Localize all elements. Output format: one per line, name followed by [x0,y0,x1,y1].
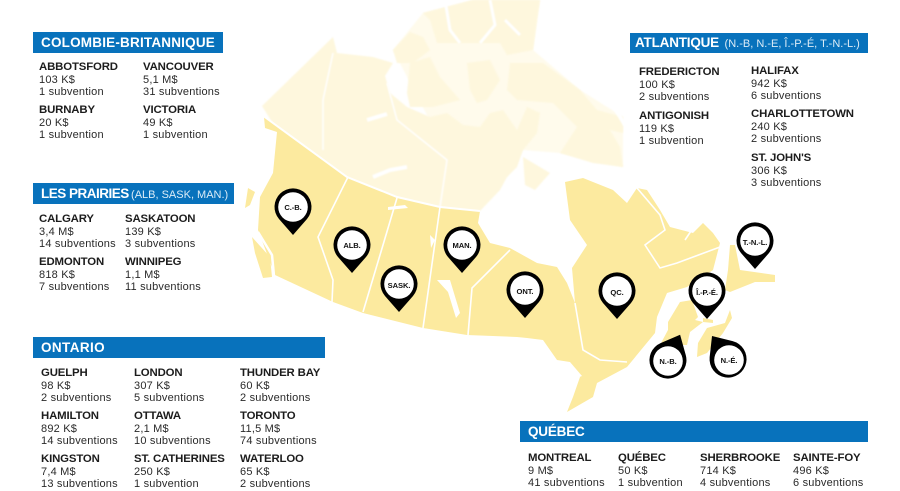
city: Hamilton: 892 K$ [41,423,77,435]
city: Guelph: 2 subventions [41,392,111,404]
city: St. John's [751,152,821,189]
heading: Québec: QUÉBEC [528,424,585,439]
city: Montreal: 9 M$ [528,465,553,477]
city: Québec: QUÉBEC [618,452,666,464]
city: Ottawa: OTTAWA [134,410,181,422]
pin: Î.-P.-É.: Î.-P.-É. [695,288,718,297]
city: Thunder Bay: 60 K$ [240,380,270,392]
city: Antigonish: 119 K$ [639,123,674,135]
city: Toronto [240,410,317,447]
city: Edmonton: 7 subventions [39,281,109,293]
city: Vancouver: 31 subventions [143,86,220,98]
pin: C.-B.: C.-B. [284,203,302,212]
city: Burnaby: 1 subvention [39,129,104,141]
pin: N.-É.: N.-É. [721,356,737,365]
city: Calgary [39,213,116,250]
city: Burnaby: 20 K$ [39,117,69,129]
city: Montreal: MONTREAL [528,452,591,464]
city: Kingston: KINGSTON [41,453,100,465]
panel: Colombie-Britannique [33,32,223,141]
panel: Atlantique [630,33,868,189]
city: Saskatoon: 139 K$ [125,226,161,238]
city: Antigonish [639,110,709,147]
city: Fredericton: 100 K$ [639,79,675,91]
city: Sainte-Foy: SAINTE-FOY [793,452,860,464]
heading: Ontario [33,337,325,358]
pin: T.-N.-L. [737,222,774,269]
city: Sherbrooke: SHERBROOKE [700,452,780,464]
city: Ottawa: 10 subventions [134,435,211,447]
northern territories [262,0,623,211]
pin: SASK.: SASK. [388,281,410,290]
city: Calgary: 14 subventions [39,238,116,250]
city: Charlottetown [751,108,854,145]
city: Edmonton: EDMONTON [39,256,104,268]
heading: Ontario: ONTARIO [41,340,105,355]
city: St. Catherines: 250 K$ [134,466,170,478]
city: St. John's: 306 K$ [751,165,787,177]
pin: QC. [598,272,636,319]
city: Burnaby: BURNABY [39,104,95,116]
pin: N.-É. [697,325,754,385]
city: Ottawa: 2,1 M$ [134,423,169,435]
pin: ALB.: ALB. [343,241,361,250]
city: Calgary: 3,4 M$ [39,226,74,238]
panel: Ontario [33,337,325,490]
city: Halifax: 942 K$ [751,78,787,90]
city: St. John's: ST. JOHN'S [751,152,811,164]
city: Fredericton [639,66,719,103]
provincial borders and lakes [258,115,720,362]
pin: MAN. [444,226,480,273]
city: Antigonish: 1 subvention [639,135,704,147]
pin: SASK. [381,265,418,312]
city: Guelph: GUELPH [41,367,88,379]
pin: QC.: QC. [610,288,624,297]
city: Toronto: 11,5 M$ [240,423,280,435]
panel: Les Prairies [33,183,234,293]
pin: C.-B. [274,188,312,235]
city: Winnipeg: 1,1 M$ [125,269,160,281]
pin: ALB. [334,226,370,273]
city: Waterloo: WATERLOO [240,453,304,465]
city: Antigonish: ANTIGONISH [639,110,709,122]
heading: Les Prairies [33,183,234,204]
city: Edmonton: 818 K$ [39,269,75,281]
city: Sainte-Foy: 6 subventions [793,477,863,489]
city: Abbotsford: 1 subvention [39,86,104,98]
city: Québec [618,451,683,489]
city: London: 307 K$ [134,380,170,392]
city: Fredericton: FREDERICTON [639,66,719,78]
city: Kingston [41,453,118,490]
city: Victoria [143,104,208,141]
city: Burnaby [39,104,104,141]
city: Québec: 50 K$ [618,465,648,477]
city: Toronto: TORONTO [240,410,296,422]
arctic channels and northern lakes [323,0,625,207]
city: Thunder Bay: THUNDER BAY [240,367,320,379]
city: London: LONDON [134,367,182,379]
city: Montreal: 41 subventions [528,477,605,489]
city: Sainte-Foy: 496 K$ [793,465,829,477]
city: Halifax [751,65,821,102]
city: St. Catherines: ST. CATHERINES [134,453,225,465]
pin: MAN.: MAN. [452,241,472,250]
city: Vancouver: 5,1 M$ [143,74,178,86]
city: Calgary: CALGARY [39,213,94,225]
city: Sherbrooke: 714 K$ [700,465,736,477]
city: St. Catherines: 1 subvention [134,478,199,490]
city: Sherbrooke: 4 subventions [700,477,770,489]
heading: Les Prairies: LES PRAIRIES (ALB, SASK, MAN.) [41,186,228,201]
city: Guelph: 98 K$ [41,380,71,392]
pin: ONT.: ONT. [517,287,533,296]
city: London: 5 subventions [134,392,204,404]
city: Guelph [41,367,111,404]
city: Halifax: HALIFAX [751,65,799,77]
pin: Î.-P.-É. [688,272,726,319]
arctic wash [393,0,623,177]
pin: ONT. [507,271,544,318]
panel: Québec [520,421,868,489]
city: Vancouver: VANCOUVER [143,61,214,73]
city: Winnipeg: 11 subventions [125,281,201,293]
heading: Colombie-Britannique: COLOMBIE-BRITANNIQUE [41,35,215,50]
city: Toronto: 74 subventions [240,435,317,447]
city: London [134,367,204,404]
city: Victoria: 49 K$ [143,117,173,129]
heading: Atlantique: ATLANTIQUE (N.-B, N.-E, Î.-P.-É, T.-N.-L.) [635,35,860,50]
city: Thunder Bay: 2 subventions [240,392,310,404]
pin: N.-B.: N.-B. [659,357,677,366]
city: Hamilton [41,410,118,447]
city: Waterloo: 2 subventions [240,478,310,490]
city: Edmonton [39,256,109,293]
city: Hamilton: 14 subventions [41,435,118,447]
pin: N.-B. [643,327,697,385]
city: Charlottetown: 2 subventions [751,133,821,145]
city: Québec: 1 subvention [618,477,683,489]
city: St. John's: 3 subventions [751,177,821,189]
city: Abbotsford: 103 K$ [39,74,75,86]
city: Ottawa [134,410,211,447]
city: Halifax: 6 subventions [751,90,821,102]
city: Vancouver [143,61,220,98]
city: Charlottetown: CHARLOTTETOWN [751,108,854,120]
city: Thunder Bay [240,367,320,404]
city: St. Catherines [134,453,225,490]
city: Kingston: 7,4 M$ [41,466,76,478]
heading: Québec [520,421,868,442]
city: Charlottetown: 240 K$ [751,121,787,133]
city: Abbotsford [39,61,118,98]
city: Winnipeg: WINNIPEG [125,256,181,268]
city: Winnipeg [125,256,201,293]
city: Waterloo: 65 K$ [240,466,270,478]
city: Saskatoon [125,213,195,250]
city: Victoria: VICTORIA [143,104,196,116]
city: Waterloo [240,453,310,490]
city: Fredericton: 2 subventions [639,91,709,103]
city: Hamilton: HAMILTON [41,410,99,422]
city: Saskatoon: SASKATOON [125,213,195,225]
pin: T.-N.-L.: T.-N.-L. [743,238,767,247]
city: Kingston: 13 subventions [41,478,118,490]
city: Montreal [528,452,605,489]
southern provinces [245,117,775,412]
heading: Colombie-Britannique [33,32,223,53]
city: Sainte-Foy [793,452,863,489]
city: Victoria: 1 subvention [143,129,208,141]
city: Saskatoon: 3 subventions [125,238,195,250]
city: Abbotsford: ABBOTSFORD [39,61,118,73]
city: Sherbrooke [700,452,780,489]
